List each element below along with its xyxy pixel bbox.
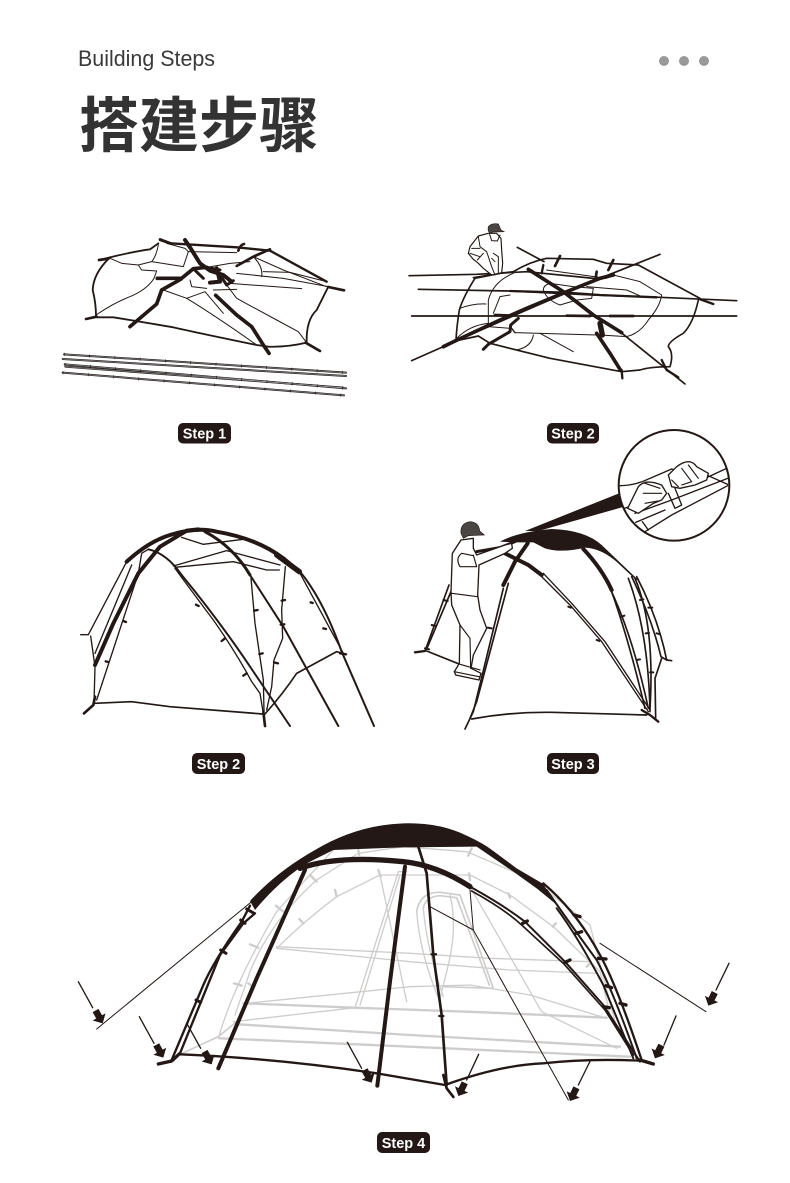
arrow: stake 8 [702, 963, 729, 1009]
badge: Step 1 [178, 423, 231, 444]
thin tent folds [457, 270, 662, 352]
left ladder poles [158, 906, 255, 1064]
arrow: stake 1 [78, 982, 109, 1027]
arrow: stake 3 [187, 1024, 218, 1068]
illustration: step 2 tent frame rising [81, 529, 374, 726]
floor edge [180, 1054, 640, 1085]
pole clips [106, 600, 346, 676]
thin frame and body lines [81, 537, 345, 714]
arrow: stake 2 [139, 1017, 170, 1061]
illustration: step 1 pole bundle [63, 354, 346, 395]
badge: Step 2 top [547, 423, 599, 444]
thick pole sleeves [443, 256, 678, 378]
illustration: step 2 poles threaded through tent [409, 224, 737, 384]
badge: Step 2 bottom [192, 753, 245, 774]
detail circle: hands on clip [619, 430, 729, 541]
thick roof sleeves [84, 529, 299, 726]
badge: Step 3 [547, 753, 599, 774]
title: 搭建步骤: 搭建步骤 [79, 93, 319, 160]
arrow: stake 6 [563, 1060, 591, 1104]
thick roof and sleeves [500, 529, 640, 582]
right ladder poles [432, 883, 653, 1064]
poles [148, 549, 374, 726]
badge: Step 1: Step 1 [183, 426, 226, 442]
arrow: stake 5 [452, 1054, 479, 1099]
back leg and frame [415, 573, 672, 729]
badge: Step 2 top: Step 2 [551, 426, 595, 442]
arrow: stake 4 [347, 1042, 378, 1086]
tent outline [456, 258, 700, 372]
badge: Step 3: Step 3 [551, 757, 595, 773]
person crouching [468, 224, 504, 275]
badge: Step 4 [377, 1132, 430, 1153]
decorative three dots [659, 56, 709, 66]
tent outline [93, 240, 328, 347]
subtitle: Building Steps: Building Steps [78, 46, 215, 71]
long pole lines [409, 247, 737, 384]
thick folded poles on tent [86, 239, 344, 353]
arrow: stake 7 [648, 1016, 676, 1062]
badge: Step 2 bottom: Step 2 [197, 757, 240, 773]
second arch [300, 859, 640, 1062]
illustration: step 1 flat tent and poles [86, 239, 344, 353]
gray inner tent [180, 847, 617, 1054]
thin tent folds [96, 243, 328, 345]
guy lines [97, 890, 706, 1100]
front poles [218, 847, 453, 1097]
black roof fly [250, 823, 555, 910]
badge: Step 4: Step 4 [382, 1136, 425, 1152]
person standing [451, 522, 512, 680]
pole clips [425, 599, 660, 672]
illustration: step 4 finished tent with stakes [78, 823, 729, 1104]
zoom wedge [525, 493, 624, 531]
illustration: step 3 raising tent with person [415, 430, 729, 729]
